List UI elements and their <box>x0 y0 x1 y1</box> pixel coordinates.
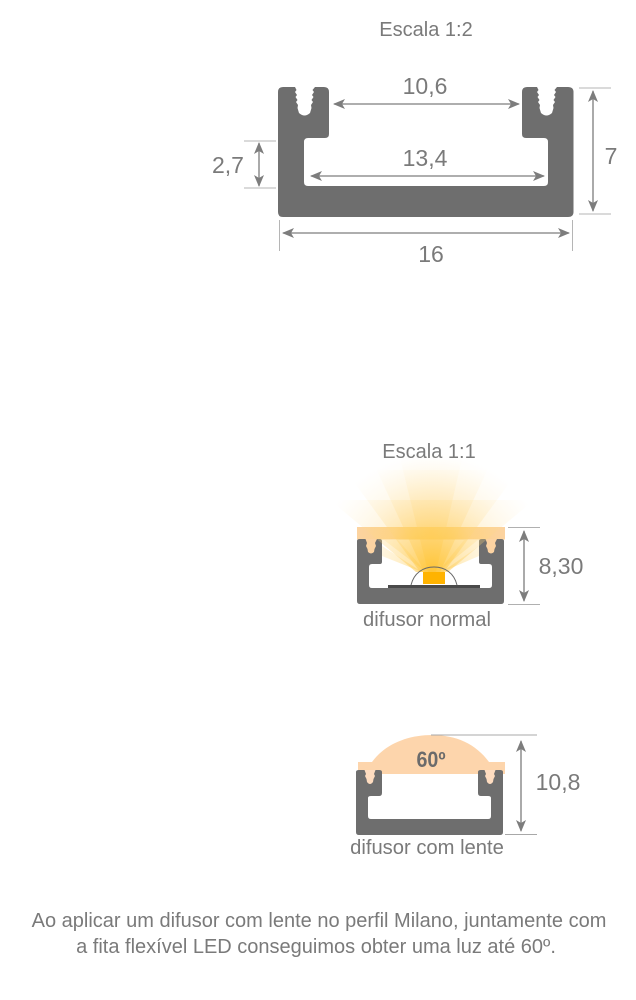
dimension labels: 10,6 <box>403 73 447 99</box>
height arrow <box>520 741 522 831</box>
caption: difusor normal <box>363 609 491 631</box>
dimension labels: 2,7 <box>212 152 244 178</box>
dimension labels: 16 <box>418 241 444 267</box>
normal diffuser diagram <box>330 450 583 631</box>
led board <box>388 585 480 588</box>
heading: scale 1:1: Escala 1:1 <box>382 441 476 463</box>
profile section <box>278 87 574 217</box>
dimension labels: 7 <box>605 143 617 169</box>
lens diffuser <box>358 735 505 774</box>
dimension labels: 13,4 <box>403 145 448 171</box>
lens diffuser diagram <box>350 735 580 859</box>
profile diagram 1:2 <box>212 73 617 267</box>
dimension lines <box>244 88 611 251</box>
profile section <box>356 770 503 835</box>
diffuser strip <box>357 527 505 540</box>
heading: scale 1:2: Escala 1:2 <box>379 19 473 41</box>
screw slots <box>295 87 315 116</box>
description text: a fita flexível LED conseguimos obter uma luz até 60º. <box>76 936 556 958</box>
caption: difusor com lente <box>350 837 504 859</box>
height arrow <box>523 531 525 601</box>
profile section <box>357 539 504 604</box>
lens outline <box>411 567 457 585</box>
angle label: 60º <box>416 747 446 772</box>
description text: Ao aplicar um difusor com lente no perfil Milano, juntamente com <box>32 910 606 932</box>
led chip <box>423 572 445 584</box>
screw slots with diffuser teeth <box>366 539 377 554</box>
lower light wedges <box>382 540 479 572</box>
dimension lines <box>508 528 540 604</box>
description text <box>32 910 606 958</box>
dimension lines <box>431 735 537 834</box>
height label: 8,30 <box>539 553 583 579</box>
height label: 10,8 <box>536 769 580 795</box>
dimension labels <box>212 73 617 267</box>
screw slots <box>364 770 376 784</box>
light rays <box>330 450 534 572</box>
